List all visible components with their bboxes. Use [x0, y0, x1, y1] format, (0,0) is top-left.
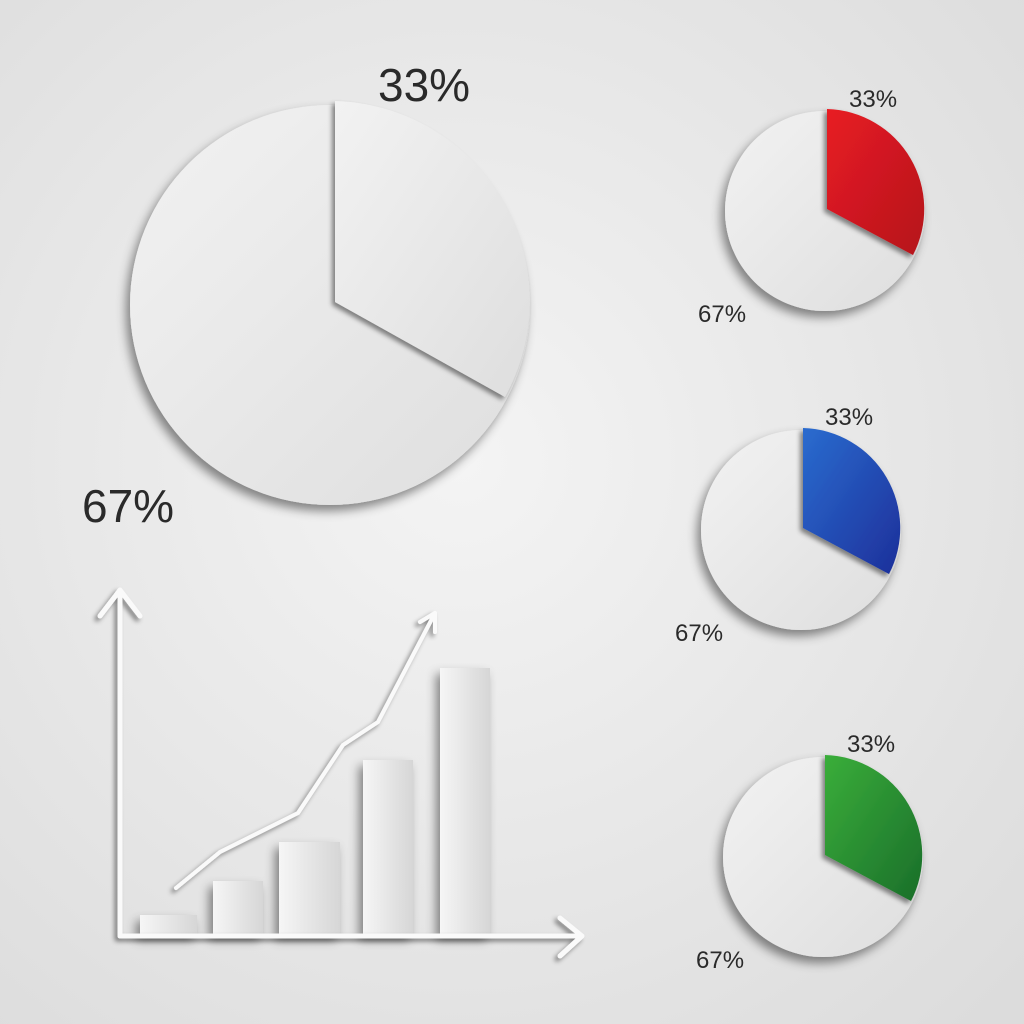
bars: [140, 668, 490, 934]
blue slice: [803, 428, 900, 574]
panel: bar chart: [100, 590, 582, 956]
red slice: [827, 109, 924, 255]
panel: green pie: [696, 731, 923, 974]
panel: blue pie: 67%: [675, 620, 723, 647]
label: 67% large: 67%: [82, 480, 174, 532]
label: 33% large: 33%: [378, 59, 470, 111]
panel: large pie chart: [82, 59, 530, 532]
axes: [100, 590, 582, 956]
green slice: [825, 755, 922, 901]
trend arrow: [176, 613, 435, 888]
panel: green pie: 33%: [847, 731, 895, 758]
panel: red pie: 33%: [849, 86, 897, 113]
large pie slice 33%: [335, 101, 530, 397]
panel: red pie: 67%: [698, 301, 746, 328]
panel: blue pie: 33%: [825, 404, 873, 431]
panel: red pie: [698, 86, 925, 328]
panel: blue pie: [675, 404, 901, 647]
panel: green pie: 67%: [696, 947, 744, 974]
